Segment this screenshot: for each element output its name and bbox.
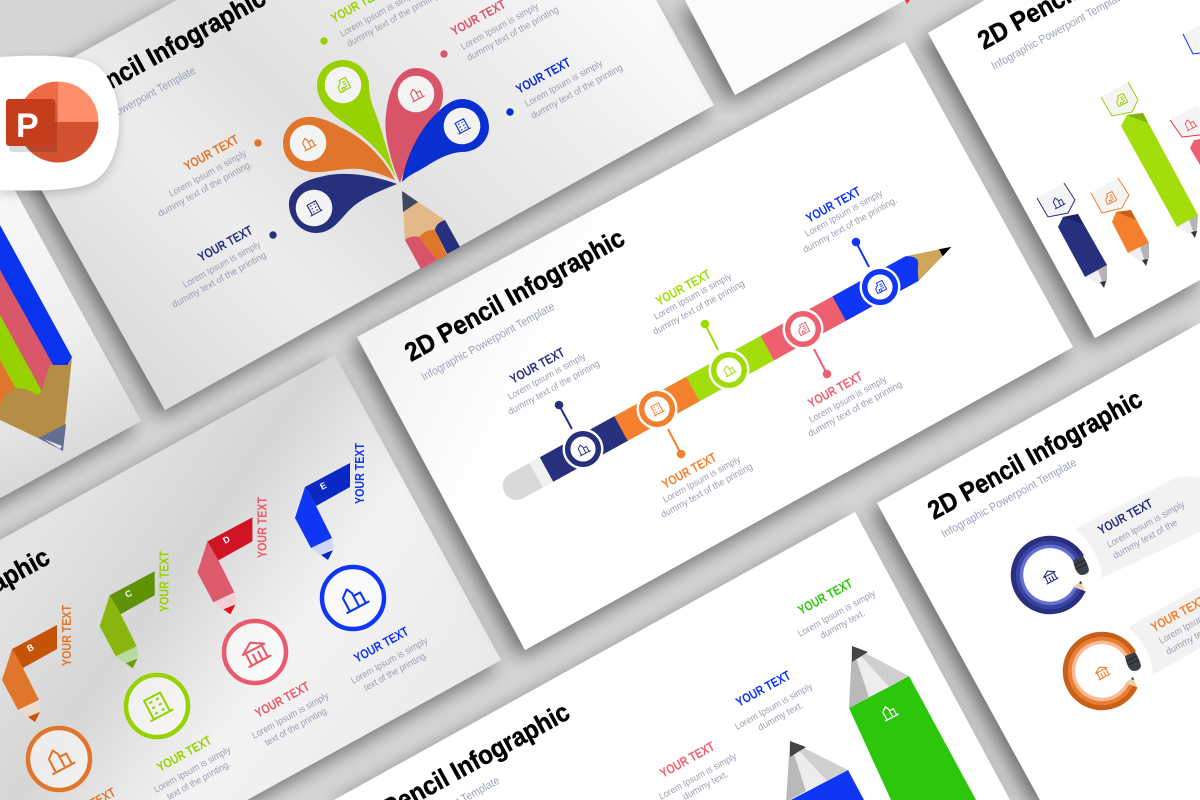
dot and label: red: dummy text of the printing (465, 4, 561, 64)
ribbon C (100, 551, 233, 800)
eraser (498, 457, 553, 505)
subtitle: Infographic Powerpoint Template (940, 457, 1079, 541)
pencil band: green (686, 336, 775, 401)
label: orange: Lorem Ipsum is simply (661, 454, 743, 506)
panel: rising pencils slide (334, 512, 1010, 800)
pencil bar: navy (1037, 183, 1107, 288)
panel: ribbon pencils slide (0, 355, 501, 800)
dot and label: navy: dummy text of the printing (170, 250, 268, 311)
label: green: Lorem Ipsum is simply (652, 271, 734, 323)
label: orange: dummy text of the printing (659, 461, 755, 521)
callout pill: navy: dummy text of the (1111, 517, 1180, 562)
label: navy: Lorem Ipsum is simply (506, 351, 588, 403)
petal: orange (283, 117, 395, 180)
label: green: dummy text. (818, 608, 867, 642)
ribbon B: B (25, 642, 36, 654)
ribbon E: YOUR TEXT (352, 443, 367, 504)
marker: navy (555, 401, 604, 470)
callout pill: navy: Lorem Ipsum is simply (1105, 499, 1187, 551)
tall pencil: green (849, 646, 976, 800)
label: green: dummy text of the printing (651, 278, 747, 338)
label: red: Lorem Ipsum is simply (807, 374, 889, 426)
label: green: YOUR TEXT (795, 576, 855, 618)
pencil bar: red (1170, 105, 1200, 165)
dot and label: blue: dummy text of the printing (529, 62, 625, 122)
ribbon C: YOUR TEXT (157, 551, 172, 612)
big pencil (0, 225, 72, 451)
ribbon D: Lorem Ipsum is simply (250, 690, 331, 742)
subtitle: Infographic Powerpoint Template (420, 301, 557, 384)
ribbon B (2, 605, 118, 800)
ribbon D: YOUR TEXT (252, 679, 312, 721)
petal: blue (402, 99, 489, 182)
ribbon C: Lorem Ipsum is simply (152, 744, 233, 796)
circular pencil: orange (1066, 635, 1141, 708)
dot and label: navy: YOUR TEXT (195, 223, 255, 265)
ribbon E (295, 443, 430, 694)
ribbon C: YOUR TEXT (154, 733, 214, 775)
label: blue: Lorem Ipsum is simply (803, 188, 885, 240)
callout pill: orange (1128, 587, 1200, 675)
petal: red (385, 68, 443, 183)
marker: orange (636, 388, 685, 458)
panel: main timeline slide (357, 42, 1073, 650)
panel: circular pencils slide (877, 323, 1200, 800)
pencil drawing the petals (402, 191, 460, 269)
label: orange: YOUR TEXT (659, 450, 719, 492)
label: blue: dummy text of the printing. (801, 195, 899, 256)
dot and label: orange: YOUR TEXT (181, 132, 241, 174)
pencil band: blue (832, 252, 926, 321)
pencil bar: green (1101, 82, 1198, 238)
panel: top empty slide (685, 0, 910, 95)
pencil bar: orange (1091, 178, 1149, 266)
marker: green (701, 320, 750, 390)
callout pill: navy (1075, 476, 1200, 578)
label: blue: YOUR TEXT (733, 668, 793, 710)
pencil band: navy (540, 416, 628, 482)
label: blue: Lorem Ipsum is simply (733, 681, 815, 733)
subtitle: Infographic Powerpoint Template (61, 65, 198, 148)
callout pill: navy: YOUR TEXT (1095, 496, 1155, 538)
label: navy: dummy text of the printing (506, 358, 602, 418)
label: green: YOUR TEXT (653, 267, 713, 309)
pencil band: red (761, 296, 846, 360)
panel: big pencil slide (0, 90, 141, 520)
label: blue: YOUR TEXT (803, 184, 863, 226)
icon: PowerPoint logo badge (0, 56, 119, 190)
marker: red (782, 308, 831, 378)
dot and label: blue: YOUR TEXT (513, 55, 573, 97)
ribbon D (197, 497, 331, 749)
petal: green (317, 60, 396, 178)
label: green: Lorem Ipsum is simply (796, 588, 878, 640)
dot and label: navy: Lorem Ipsum is simply (181, 239, 263, 291)
timeline pencil (498, 235, 958, 505)
petal: navy (289, 174, 397, 233)
dot and label: orange: dummy text of the printing. (156, 159, 254, 220)
ribbon B: YOUR TEXT (59, 605, 74, 666)
dot and label: blue: Lorem Ipsum is simply (523, 58, 605, 110)
circular pencil: navy (1013, 539, 1089, 612)
ribbon D: text of the printing. (263, 705, 331, 749)
ribbon E: E (318, 480, 328, 492)
title: 2D Pencil Infographic (399, 222, 629, 367)
pencil band: orange (614, 377, 700, 441)
label: red: YOUR TEXT (805, 369, 865, 411)
label: blue: dummy text. (756, 700, 805, 734)
icon: PowerPoint logo badge: P (16, 107, 39, 145)
label: red: dummy text of the printing (806, 379, 904, 440)
ribbon E: YOUR TEXT (351, 624, 411, 666)
panel: petal pencil slide (0, 0, 714, 410)
pencil bar: blue tag (1183, 25, 1200, 55)
ribbon E: Lorem Ipsum is simply (349, 635, 430, 687)
label: red: YOUR TEXT (657, 739, 717, 781)
dot and label: orange: Lorem Ipsum is simply (167, 148, 249, 200)
ribbon C: C (123, 588, 134, 600)
ribbon D: YOUR TEXT (254, 497, 269, 558)
wood tip (905, 235, 958, 281)
marker: blue (852, 238, 900, 308)
tall pencil: blue (786, 741, 864, 800)
dot and label: navy (170, 223, 277, 311)
title: 2D Pencil Infographic (922, 383, 1147, 525)
panel: bar pencils slide (928, 0, 1200, 338)
label: navy: YOUR TEXT (507, 345, 567, 387)
ribbon E: text of the printing. (362, 650, 430, 694)
ribbon D: D (221, 534, 232, 546)
